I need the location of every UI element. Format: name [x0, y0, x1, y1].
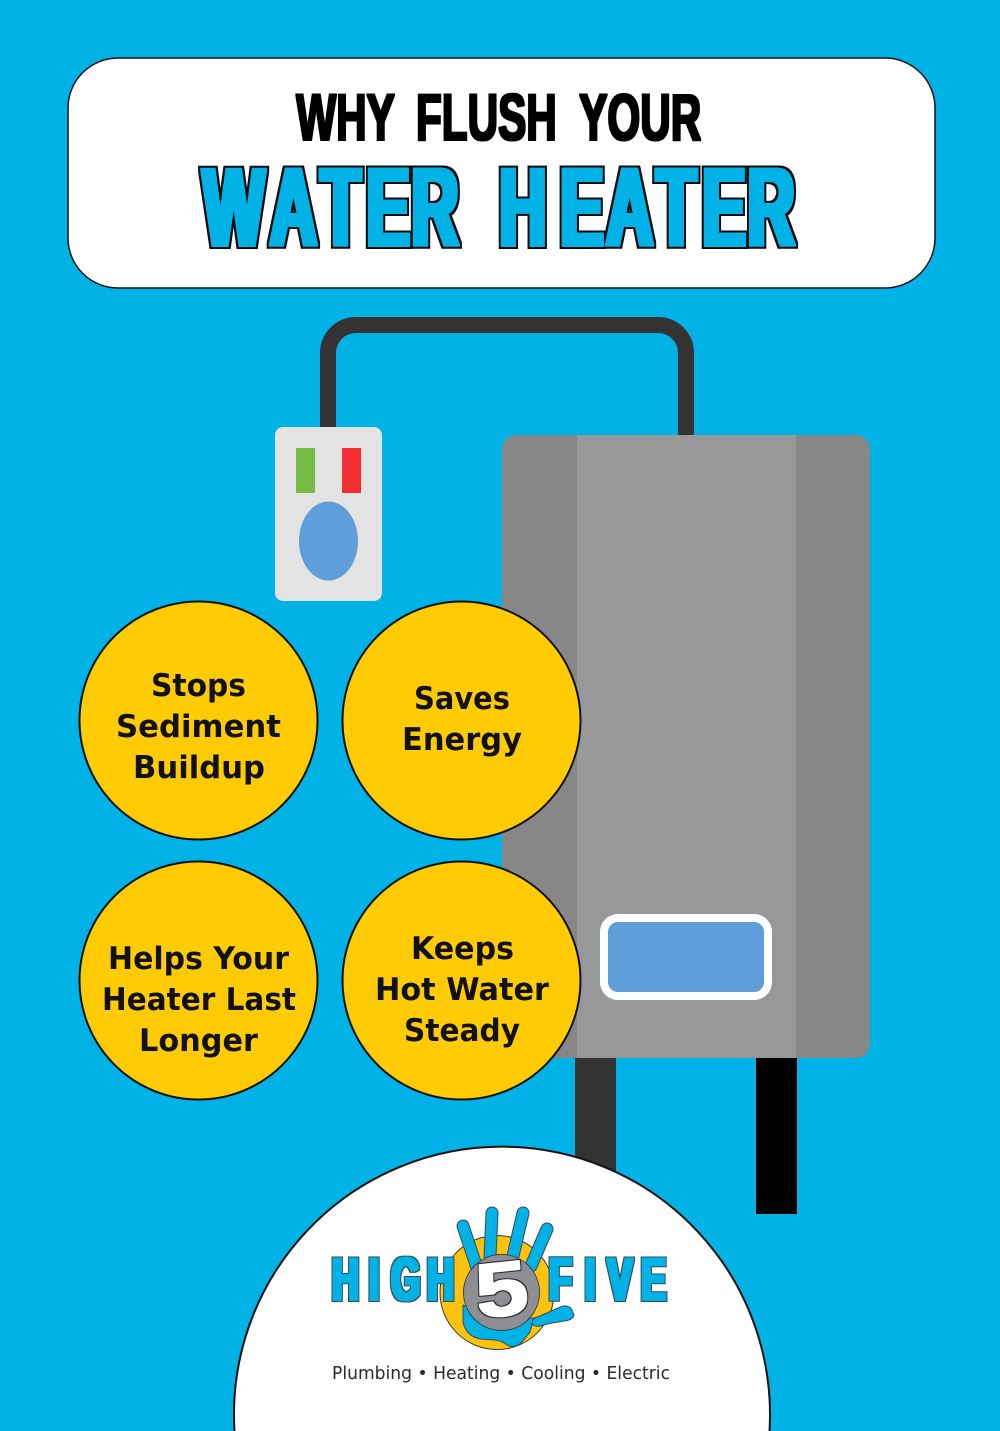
logo numeral 5: 5 — [471, 1245, 532, 1335]
benefit: stops sediment buildup: Buildup — [133, 750, 265, 786]
benefit: keeps hot water steady: Keeps — [411, 931, 514, 967]
heater body — [502, 435, 870, 1058]
benefit: keeps hot water steady — [342, 862, 580, 1100]
benefit: helps your heater last longer: Longer — [139, 1023, 259, 1059]
benefit: helps your heater last longer: Heater Last — [102, 982, 296, 1018]
heater centre panel — [577, 435, 796, 1058]
benefit: helps your heater last longer: Helps Your — [108, 941, 290, 977]
panel: water heater unit — [502, 435, 870, 1058]
panel: title banner — [68, 58, 935, 288]
benefit: stops sediment buildup: Stops — [151, 668, 246, 704]
panel: control box — [275, 427, 382, 601]
heading: why flush your — [296, 80, 701, 154]
logo blue hand — [463, 1213, 574, 1346]
logo: high five — [332, 1213, 666, 1350]
cable connecting control box to heater — [328, 325, 686, 440]
benefit: saves energy: Saves — [414, 681, 510, 717]
benefit: stops sediment buildup — [80, 602, 318, 840]
heading: why flush your: WHY — [296, 80, 395, 154]
tagline: services: Plumbing • Heating • Cooling • Electric — [332, 1363, 670, 1384]
heading: water heater: WATER HEATER — [203, 146, 795, 270]
benefit: saves energy — [342, 602, 580, 840]
red indicator — [342, 448, 361, 493]
benefit: stops sediment buildup: Sediment — [116, 709, 281, 745]
benefit: keeps hot water steady: Hot Water — [375, 972, 550, 1008]
benefit: keeps hot water steady: Steady — [404, 1013, 520, 1049]
logo word: high: HIGH — [332, 1246, 454, 1313]
logo word: five: FIVE — [549, 1246, 666, 1313]
green indicator — [296, 448, 315, 493]
drain pipe right — [756, 1050, 797, 1214]
logo yellow disc — [440, 1236, 554, 1350]
banner shape — [68, 58, 935, 288]
heading: why flush your: YOUR — [579, 80, 701, 154]
heater display — [604, 918, 768, 996]
benefit: helps your heater last longer — [80, 862, 318, 1100]
drain pipe left — [575, 1050, 616, 1180]
blue dial — [299, 502, 358, 580]
control box body — [275, 427, 382, 601]
heading: why flush your: FLUSH — [416, 80, 557, 154]
benefit: saves energy: Energy — [402, 722, 522, 758]
logo gray disc — [464, 1254, 540, 1330]
footer semicircle — [234, 1147, 770, 1431]
